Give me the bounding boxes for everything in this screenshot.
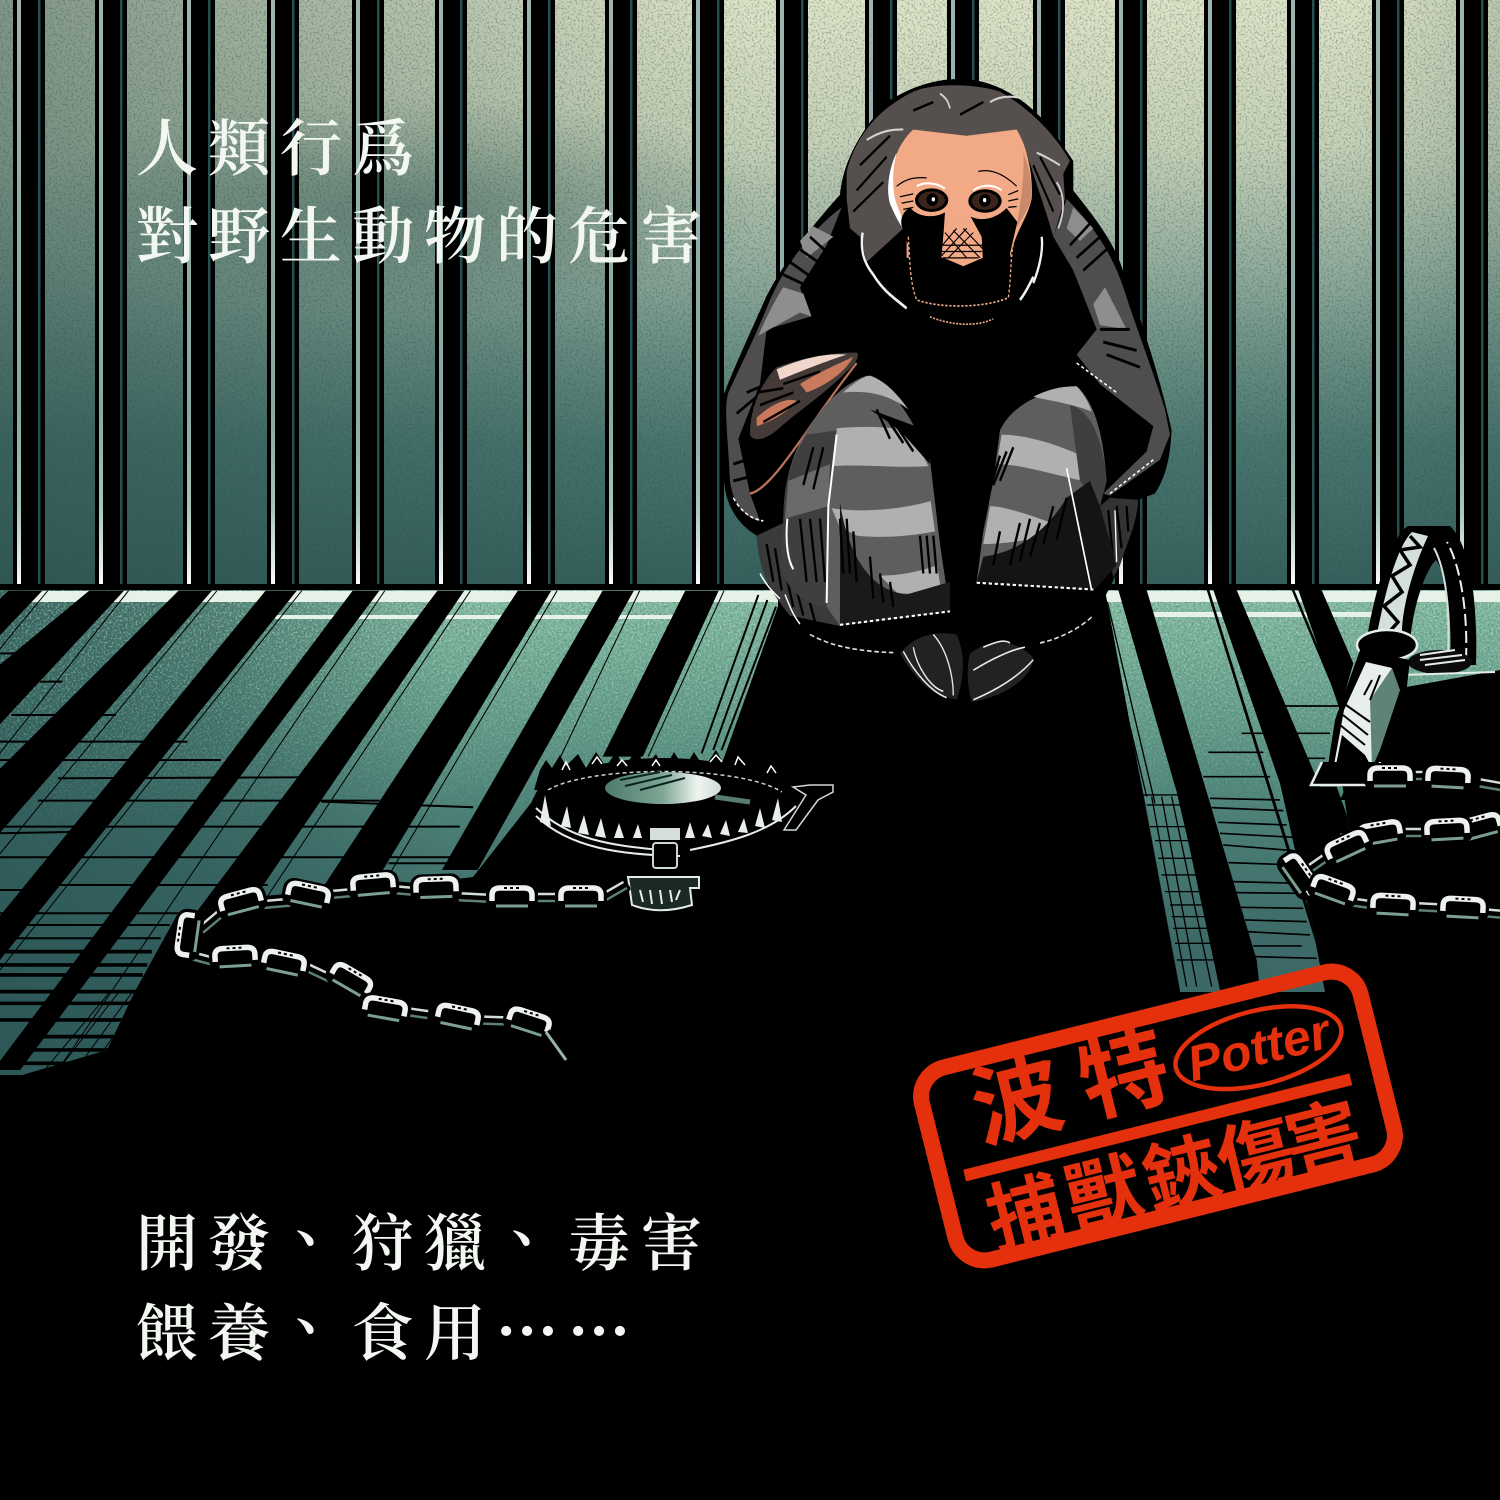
stamp subheading: 害 — [1277, 1090, 1371, 1191]
body text: 、 — [295, 1275, 357, 1343]
body text: 、 — [295, 1187, 357, 1255]
chain post — [653, 843, 677, 868]
head: hair — [847, 85, 1070, 308]
red stamp — [915, 965, 1403, 1274]
spring arm — [1325, 650, 1410, 790]
body text: 、 — [511, 1187, 573, 1255]
red stamp: 特 — [1069, 1017, 1180, 1135]
face — [888, 129, 1032, 324]
jaw collar — [1357, 630, 1417, 660]
floor lines left of monkey — [702, 595, 776, 753]
body text: …… — [496, 1281, 630, 1349]
left leg — [780, 376, 950, 626]
body text — [136, 1187, 702, 1369]
title: 對野生動物的危害 — [136, 204, 702, 272]
body silhouette — [720, 79, 1172, 658]
chain left — [171, 869, 632, 1060]
Potter oval: Potter — [1182, 1002, 1338, 1092]
left floor: horizontal cracks and bar shadows — [0, 591, 724, 1070]
stamp subheading: 獸 — [1057, 1144, 1152, 1245]
body text: 餵養 — [136, 1301, 270, 1369]
top teeth — [534, 750, 790, 790]
prison bars — [0, 0, 1500, 592]
back wall — [0, 0, 1500, 590]
stamp subheading: 傷 — [1209, 1107, 1303, 1207]
body text: 食用 — [352, 1300, 486, 1369]
bottom teeth — [540, 795, 782, 840]
bear trap right, sprung shut — [1311, 526, 1500, 800]
eye lines — [897, 171, 1018, 209]
Potter oval — [1167, 991, 1350, 1104]
trap rim — [536, 806, 796, 856]
body text: 開發 — [136, 1211, 270, 1279]
trap plate — [1408, 650, 1472, 674]
pressure plate — [605, 772, 721, 804]
lower body left — [757, 523, 893, 653]
stamp subheading: 鋏 — [1135, 1125, 1229, 1226]
chain base — [628, 877, 699, 910]
eyes — [915, 188, 948, 212]
right leg — [977, 386, 1117, 590]
chain right — [1273, 763, 1500, 923]
trap body — [532, 758, 796, 858]
stamp subheading: 捕 — [979, 1164, 1073, 1265]
stamp frame — [915, 965, 1401, 1267]
jaw arch — [1366, 526, 1476, 665]
left sleeve — [726, 207, 842, 521]
body text: 毒害 — [568, 1211, 702, 1279]
stamp divider — [963, 1073, 1352, 1181]
feet — [900, 633, 1033, 702]
stamp heading: 波 — [962, 1043, 1073, 1162]
trap base — [1311, 762, 1380, 785]
title: 人類行爲 — [136, 116, 414, 184]
muzzle shadow — [901, 207, 1017, 306]
trap handle — [784, 785, 833, 830]
body text: 狩獵 — [352, 1211, 486, 1279]
floor with bar shadows — [0, 590, 1500, 1090]
right sleeve — [1053, 199, 1170, 496]
nose — [942, 220, 983, 266]
floor right of the monkey — [1080, 590, 1353, 990]
stamp subheading — [979, 1090, 1371, 1265]
bear trap on floor — [532, 750, 833, 910]
monkey in striped prison uniform — [720, 79, 1172, 702]
title — [136, 116, 702, 272]
lower body right — [1040, 498, 1138, 643]
hand — [750, 353, 858, 494]
